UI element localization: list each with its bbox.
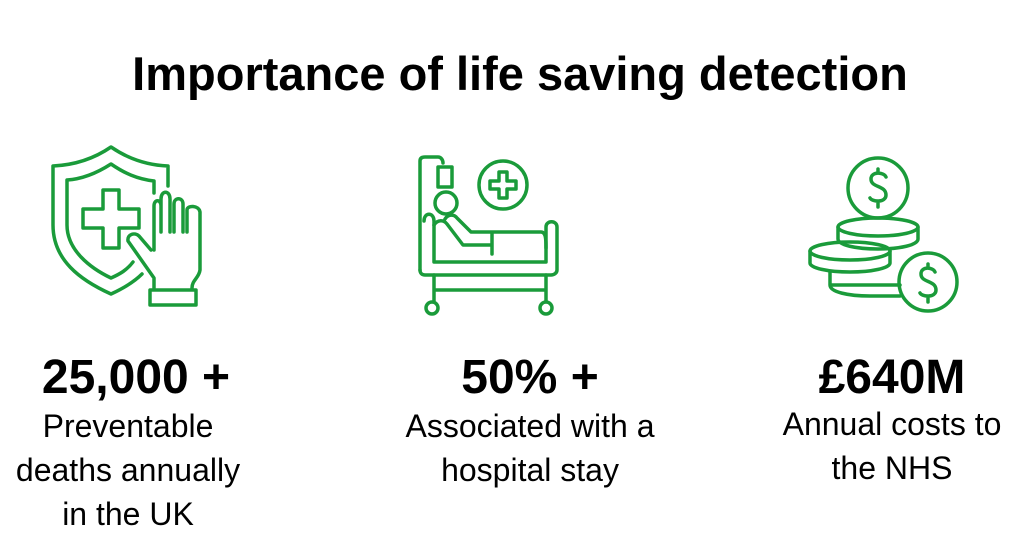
stat: deaths: deaths annually	[16, 452, 240, 488]
stat: deaths: in the UK	[62, 496, 194, 532]
stat: hospital: hospital stay	[441, 452, 619, 488]
stat: costs: Annual costs to	[783, 406, 1001, 442]
title: Importance of life saving detection	[132, 47, 908, 100]
stat: hospital: 50% +	[461, 351, 599, 404]
icon: shield with hand	[53, 147, 200, 305]
stat: costs: the NHS	[832, 450, 952, 486]
stat: hospital	[405, 351, 655, 488]
stat: costs	[782, 351, 1001, 486]
icon: coins	[810, 158, 957, 311]
stat: deaths: 25,000 +	[42, 351, 230, 404]
stat: hospital: Associated with a	[405, 408, 654, 444]
stat: deaths	[16, 351, 240, 532]
icon: hospital bed	[420, 157, 557, 314]
stat: deaths: Preventable	[43, 408, 213, 444]
stat: costs: £640M	[819, 351, 965, 404]
